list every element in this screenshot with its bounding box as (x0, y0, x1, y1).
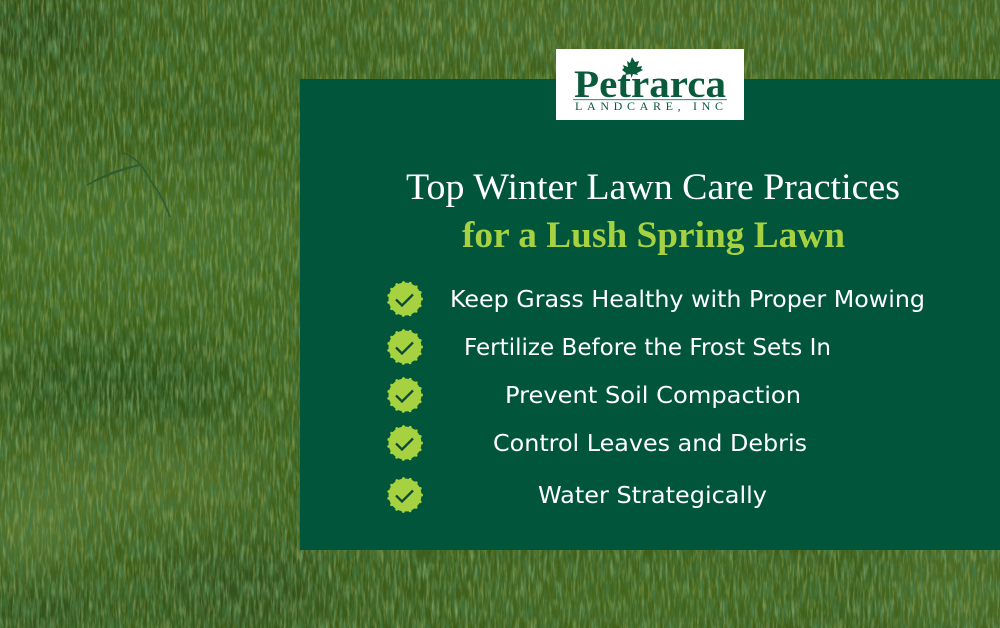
title line 2: for a Lush Spring Lawn (462, 215, 845, 256)
grass blade (87, 153, 170, 217)
panel: green content box (300, 79, 1000, 550)
icon: maple leaf (622, 57, 643, 78)
title (406, 167, 900, 256)
item 4: Control Leaves and Debris (493, 431, 807, 457)
item 5 (388, 478, 767, 512)
item 5: Water Strategically (538, 483, 767, 509)
checklist (388, 282, 925, 512)
logo (556, 49, 744, 120)
item 4 (388, 426, 807, 460)
item 2: Fertilize Before the Frost Sets In (464, 335, 831, 361)
item 2 (388, 330, 831, 364)
item 1 (388, 282, 925, 316)
logo wordmark: Petrarca (574, 63, 726, 106)
item 3: Prevent Soil Compaction (505, 383, 801, 409)
item 3 (388, 378, 801, 412)
title line 1: Top Winter Lawn Care Practices (406, 167, 900, 208)
logo subline: LANDCARE, INC (575, 99, 723, 113)
item 1: Keep Grass Healthy with Proper Mowing (450, 287, 925, 313)
